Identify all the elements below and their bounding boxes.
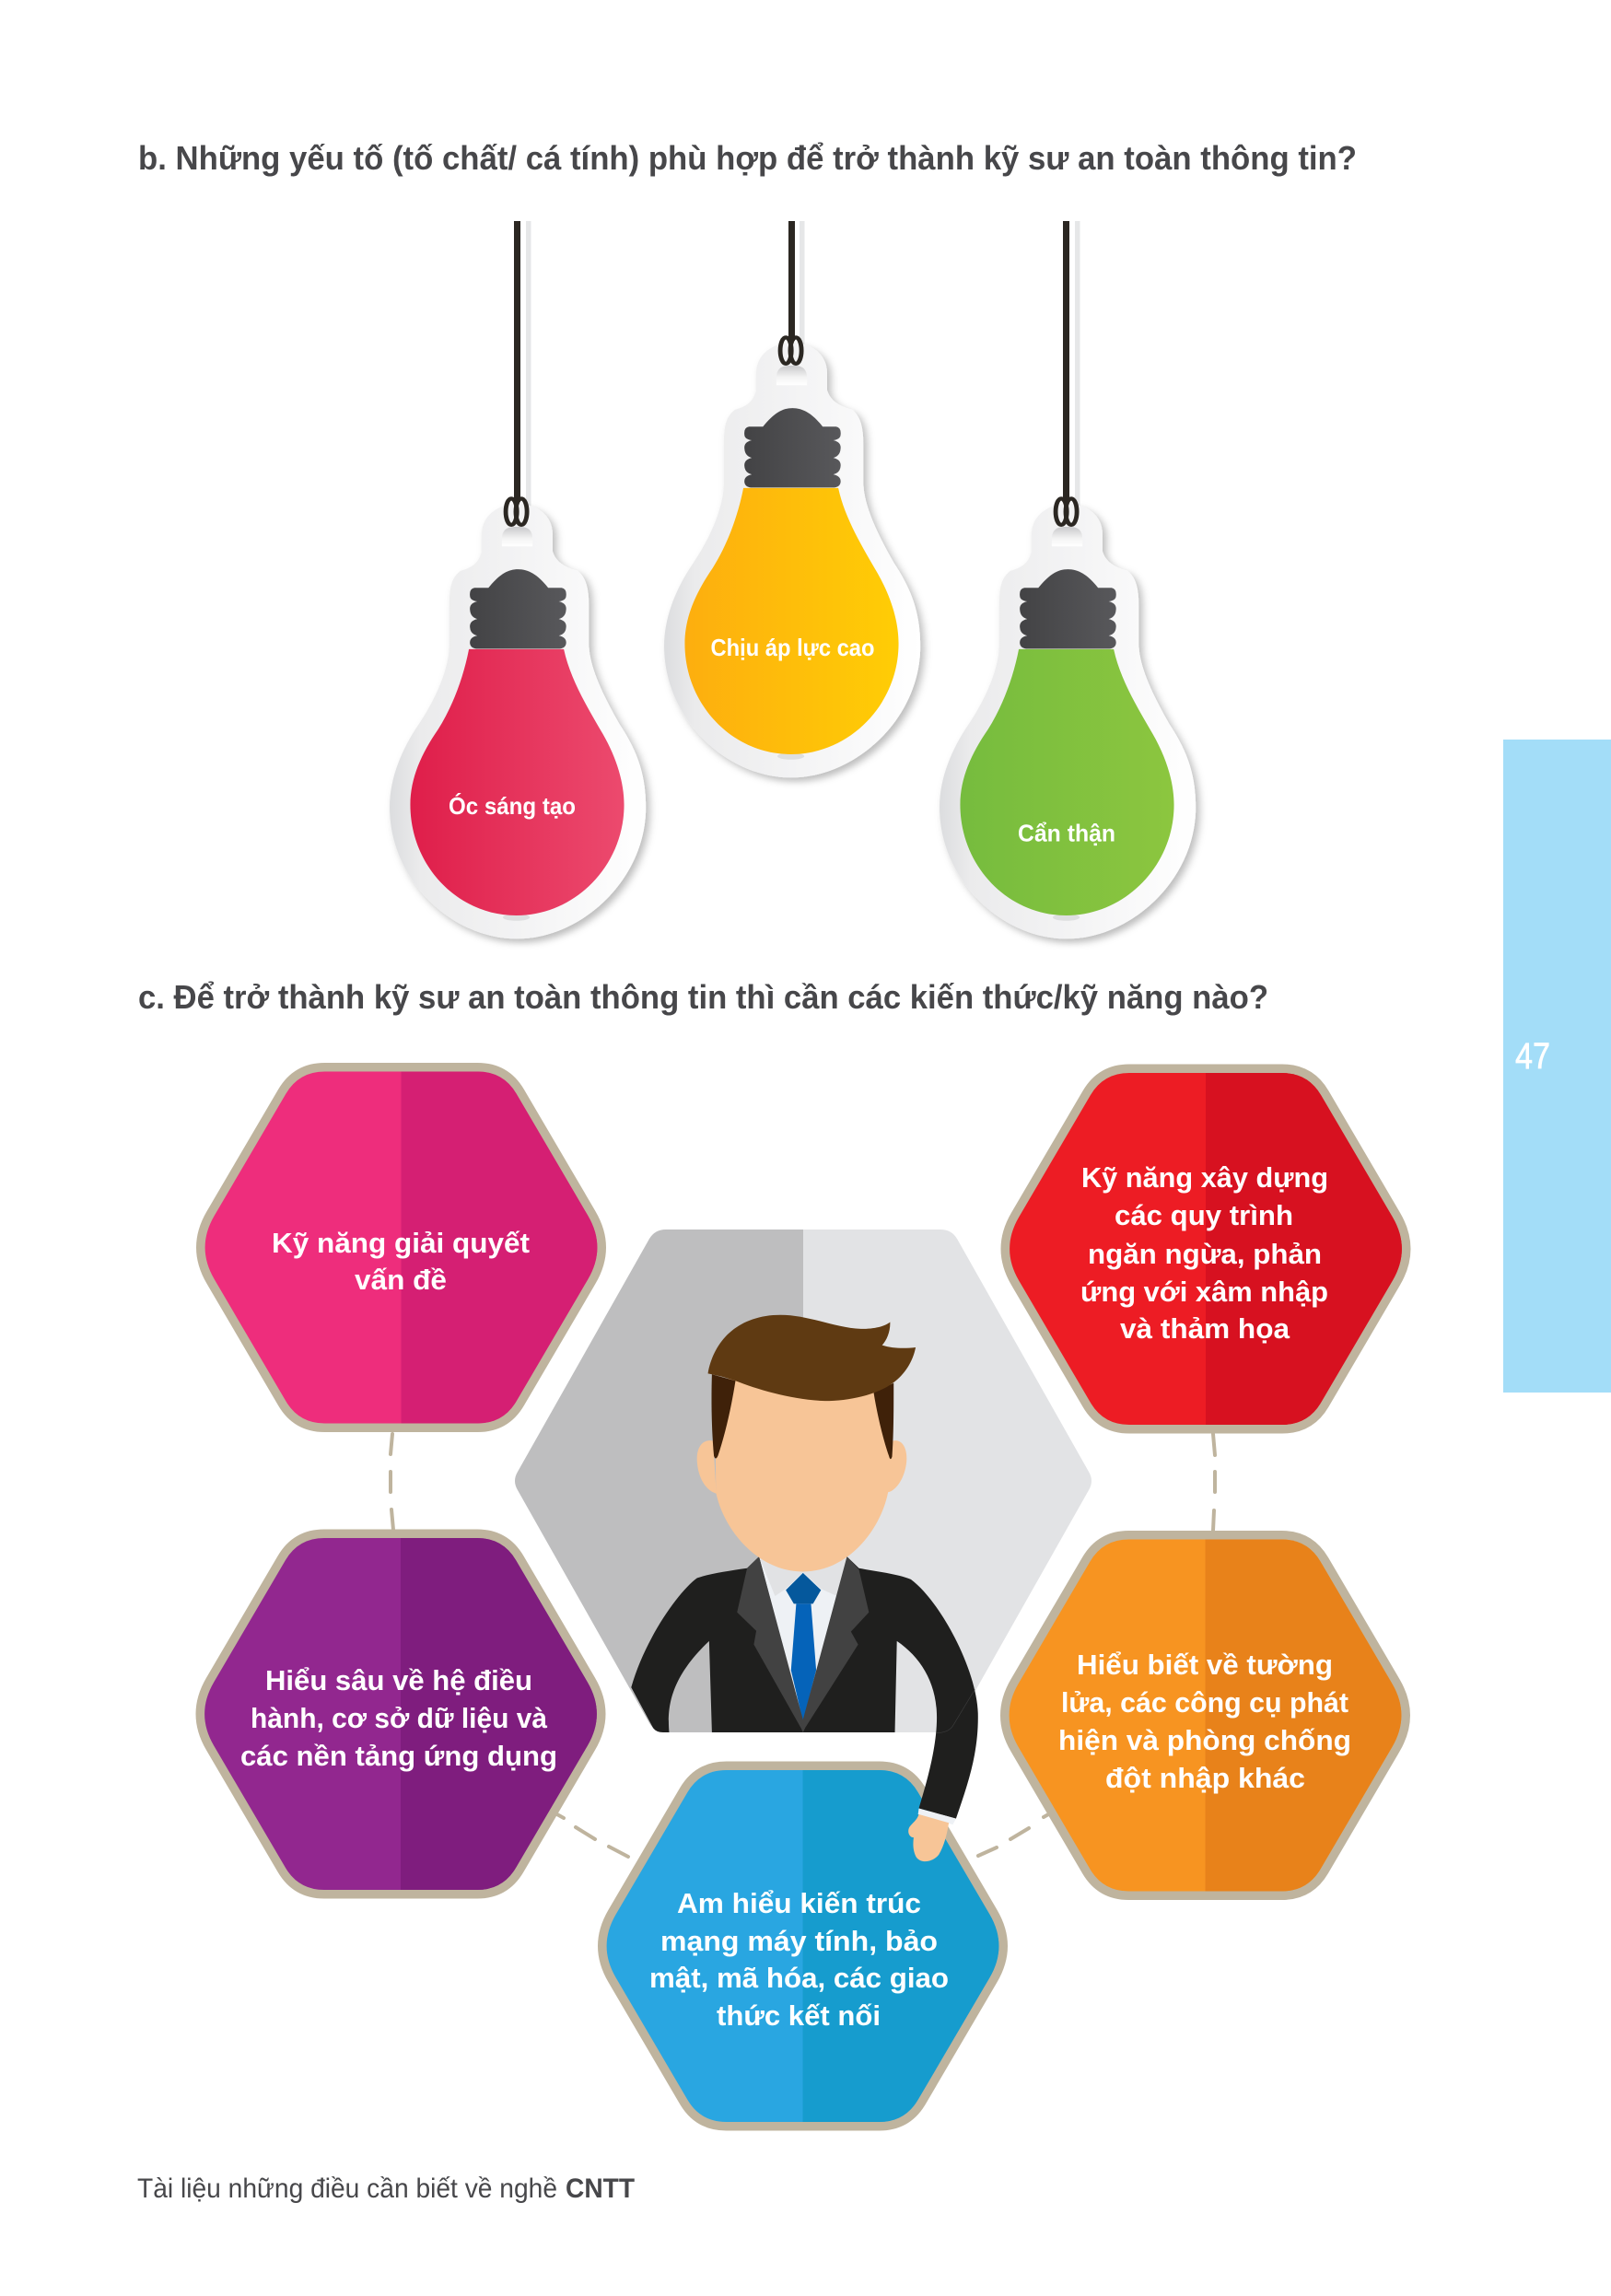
- hexagon: red: ứng với xâm nhập: [1080, 1276, 1328, 1308]
- hexagon: blue: mật, mã hóa, các giao: [649, 1962, 949, 1994]
- hexagon: orange: hiện và phòng chống: [1058, 1724, 1351, 1756]
- hexagon: pink: [205, 1072, 597, 1424]
- footer: Tài liệu những điều cần biết về nghề: [137, 2174, 557, 2204]
- hexagon: purple: các nền tảng ứng dụng: [240, 1740, 557, 1772]
- sidebar tab: [1503, 740, 1611, 1393]
- dashed connectors: [391, 1434, 1215, 1857]
- heading c: c. Để trở thành kỹ sư an toàn thông tin thì cần các kiến thức/kỹ năng nào?: [138, 978, 1268, 1016]
- hexagon: blue: mạng máy tính, bảo: [660, 1925, 938, 1957]
- hexagon: blue: [607, 1770, 998, 2122]
- hexagon: purple: hành, cơ sở dữ liệu và: [251, 1702, 548, 1734]
- hexagon: pink: vấn đề: [355, 1264, 447, 1296]
- hexagon: red: các quy trình: [1115, 1199, 1293, 1231]
- hexagon: orange: đột nhập khác: [1105, 1762, 1305, 1794]
- heading b: b. Những yếu tố (tố chất/ cá tính) phù hợp để trở thành kỹ sư an toàn thông tin?: [138, 139, 1357, 177]
- bulb: óc sáng tạo: [390, 221, 646, 938]
- hexagon: pink: Kỹ năng giải quyết: [272, 1227, 530, 1259]
- bulb: cẩn thận: [940, 221, 1196, 938]
- hexagon: red: ngăn ngừa, phản: [1088, 1238, 1322, 1270]
- bulb: chịu áp lực cao: [664, 221, 920, 777]
- label: cẩn thận: Cẩn thận: [1018, 820, 1115, 847]
- hexagon: orange: Hiểu biết về tường: [1077, 1649, 1333, 1681]
- hexagon: purple: [204, 1538, 597, 1890]
- label: chịu áp lực cao: Chịu áp lực cao: [711, 634, 875, 661]
- hexagon: blue: thức kết nối: [717, 1999, 881, 2032]
- label: óc sáng tạo: Óc sáng tạo: [449, 792, 576, 820]
- page number: 47: [1515, 1036, 1550, 1077]
- hexagon: red: và thảm họa: [1120, 1312, 1290, 1345]
- hexagon: red: Kỹ năng xây dựng: [1081, 1161, 1328, 1194]
- central grey hexagon: [515, 1230, 1092, 1732]
- footer: CNTT: [566, 2174, 635, 2204]
- hexagon: purple: Hiểu sâu về hệ điều: [265, 1664, 532, 1696]
- hexagon: red: [1010, 1073, 1402, 1425]
- person in suit: [631, 1315, 978, 1861]
- hexagon: orange: lửa, các công cụ phát: [1061, 1686, 1348, 1719]
- hexagon: orange: [1010, 1540, 1401, 1892]
- hexagon: blue: Am hiểu kiến trúc: [677, 1887, 921, 1919]
